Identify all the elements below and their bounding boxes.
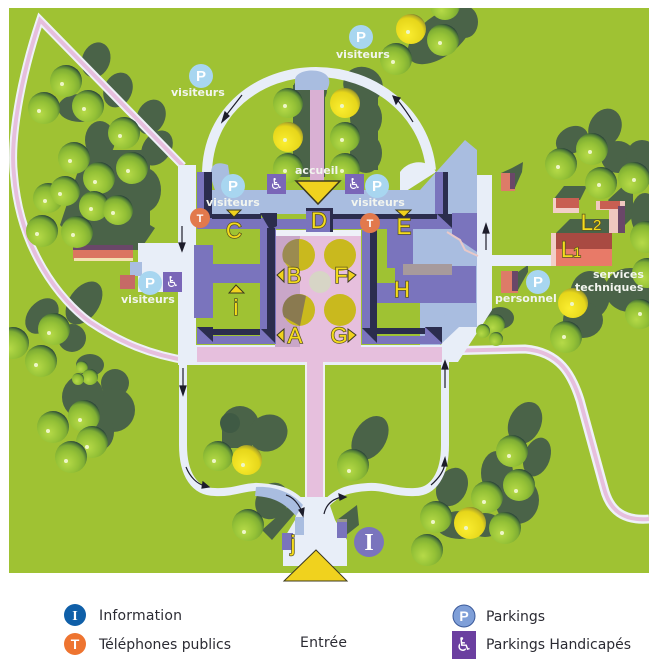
- legend: information: Information: [99, 608, 182, 624]
- legend: accessible parking: ♿: [455, 634, 473, 656]
- map labels: personnel: [495, 292, 557, 305]
- parking letters: P: [145, 275, 155, 292]
- map labels: visiteurs: [351, 196, 405, 209]
- building letters: A: [288, 323, 303, 348]
- blue forecourts: [130, 71, 477, 516]
- legend: parking: Parkings: [486, 609, 545, 625]
- accessible parking icons: ♿: [348, 175, 361, 193]
- parking markers: [138, 25, 550, 295]
- yellow trees: [232, 14, 588, 539]
- legend: entrance: Entrée: [300, 635, 347, 651]
- courtyards: [413, 303, 420, 327]
- accessible parking icons: ♿: [166, 273, 179, 291]
- legend: information: [64, 604, 182, 626]
- direction arrows: [179, 95, 489, 516]
- building letters: [226, 208, 601, 556]
- map labels: visiteurs: [171, 86, 225, 99]
- tree shadows: [18, 0, 659, 540]
- parking letters: P: [372, 178, 382, 195]
- legend: parking: P: [459, 608, 469, 624]
- building letters: L1: [561, 237, 581, 262]
- telephone markers: [190, 208, 380, 233]
- parking letters: [145, 29, 543, 292]
- entrance triangle: [284, 550, 347, 581]
- parking letters: P: [228, 178, 238, 195]
- map labels: services: [593, 268, 644, 281]
- legend: public telephones: T: [71, 636, 80, 652]
- building letters: i: [234, 295, 238, 320]
- entrance pavilions: [282, 517, 347, 550]
- map labels: [121, 48, 644, 306]
- building letters: B: [287, 263, 301, 288]
- building letters: E: [397, 214, 411, 239]
- outbuildings: [73, 173, 625, 293]
- tree highlights: [34, 30, 642, 535]
- road network: [183, 72, 445, 505]
- map labels: visiteurs: [206, 196, 260, 209]
- building letters: C: [226, 218, 242, 243]
- parking letters: P: [356, 29, 366, 46]
- map labels: accueil: [295, 164, 338, 177]
- pink perimeter path, east: [442, 349, 649, 519]
- parking letters: P: [533, 274, 543, 291]
- legend: information: I: [72, 609, 78, 624]
- legend: [64, 604, 631, 659]
- building letters: F: [334, 263, 348, 288]
- accessible parking icons: [163, 174, 364, 292]
- pink central plaza: [197, 230, 442, 362]
- main building: [194, 172, 478, 344]
- telephone markers: T: [367, 218, 374, 230]
- building letters: H: [394, 277, 410, 302]
- accessible parking icons: ♿: [270, 175, 283, 193]
- legend: accessible parking: [452, 631, 631, 659]
- legend: public telephones: Téléphones publics: [98, 637, 231, 653]
- information marker: [354, 527, 384, 557]
- map labels: visiteurs: [336, 48, 390, 61]
- legend: public telephones: [64, 633, 231, 655]
- parking letters: P: [196, 68, 206, 85]
- building letters: L2: [581, 210, 601, 235]
- pink perimeter path, west: [13, 20, 190, 361]
- building letters: G: [330, 323, 348, 348]
- telephone markers: T: [197, 213, 204, 225]
- yellow pointer triangles: [227, 181, 411, 342]
- map labels: visiteurs: [121, 293, 175, 306]
- building letters: j: [290, 531, 295, 556]
- building letters: D: [311, 208, 327, 233]
- road surfaces and plaza: [138, 80, 552, 566]
- information marker: I: [364, 530, 374, 556]
- map labels: techniques: [575, 281, 644, 294]
- legend: accessible parking: Parkings Handicapés: [486, 637, 631, 653]
- legend: parking: [453, 605, 545, 627]
